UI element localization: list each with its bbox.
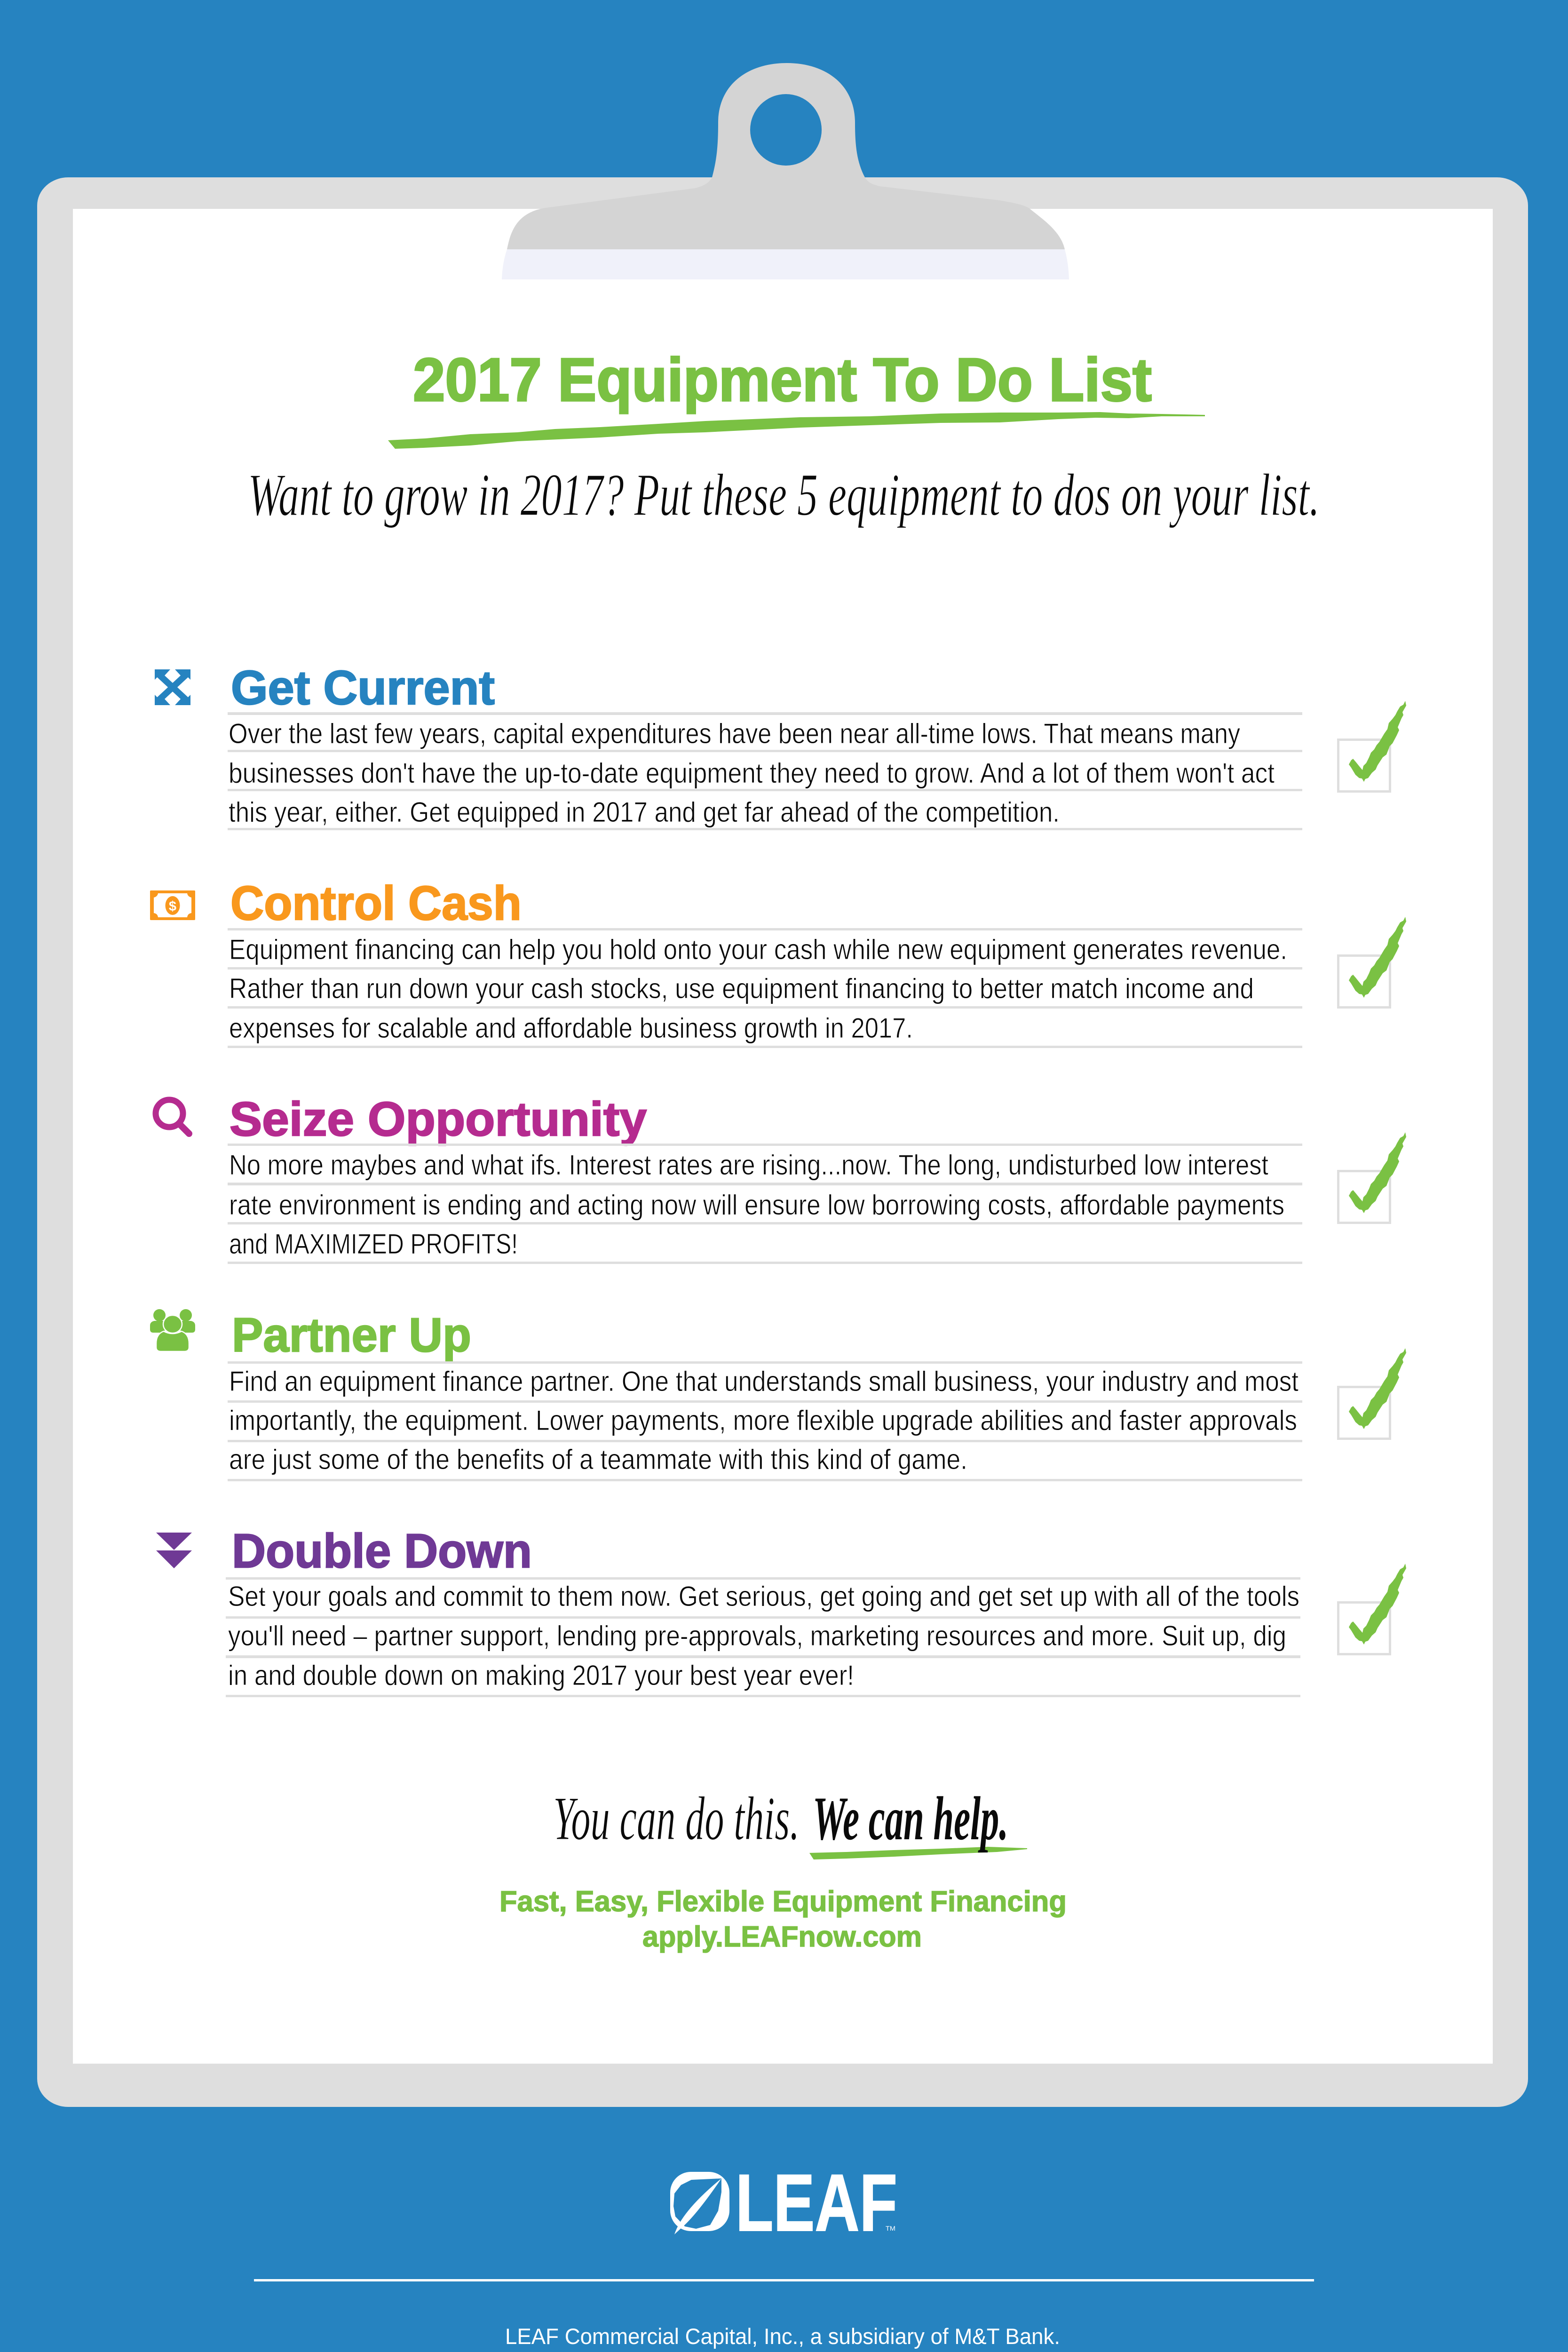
item: Partner Up [150, 1308, 1406, 1481]
icon: checked box [1338, 917, 1406, 1008]
LEAF logo [670, 2158, 897, 2248]
ruled lines [226, 1577, 1300, 1697]
brush underline [809, 1847, 1027, 1859]
body text: Over the last few years, capital expenditures have been near all-time lows. That means many [229, 718, 1240, 749]
icon: expand arrows [155, 669, 190, 705]
item: Double Down [156, 1524, 1406, 1697]
LEAF logo: LEAF [736, 2158, 897, 2248]
icon: money bill [150, 890, 195, 920]
paper sheet [73, 209, 1493, 2064]
body text: rate environment is ending and acting now will ensure low borrowing costs, affordable payments [229, 1189, 1284, 1221]
clipboard board [37, 177, 1528, 2107]
title: 2017 Equipment To Do List [413, 345, 1152, 414]
heading: Seize Opportunity [230, 1092, 647, 1146]
icon: checked box [1338, 1564, 1406, 1654]
heading: Double Down [232, 1524, 532, 1578]
body text: Equipment financing can help you hold onto your cash while new equipment generates revenue. [229, 934, 1287, 965]
body text [229, 934, 1287, 1044]
ruled lines [228, 1361, 1302, 1481]
icon: double down arrows [156, 1533, 192, 1568]
icon: money bill: $ [169, 899, 176, 914]
call to action: apply.LEAFnow.com [642, 1921, 922, 1953]
body text: in and double down on making 2017 your best year ever! [228, 1660, 854, 1691]
item: Seize Opportunity [156, 1092, 1406, 1264]
body text: you'll need – partner support, lending pre-approvals, marketing resources and more. Suit up, dig [228, 1620, 1286, 1652]
body text: No more maybes and what ifs. Interest rates are rising...now. The long, undisturbed low interest [229, 1149, 1268, 1181]
body text [229, 718, 1275, 828]
body text: Rather than run down your cash stocks, use equipment financing to better match income and [229, 973, 1254, 1004]
body text [228, 1581, 1299, 1691]
heading: Partner Up [232, 1308, 471, 1362]
heading: Control Cash [230, 876, 522, 930]
footer divider [254, 2279, 1314, 2281]
handwritten closing line: We can help. [813, 1784, 1008, 1853]
item: Control Cash [150, 876, 1406, 1048]
body text [229, 1366, 1299, 1475]
body text: this year, either. Get equipped in 2017 and get far ahead of the competition. [229, 796, 1060, 828]
icon: checked box [1338, 701, 1406, 791]
icon: magnifier [156, 1100, 189, 1134]
icon: checked box [1338, 1348, 1406, 1438]
heading: Get Current [231, 661, 495, 715]
body text: businesses don't have the up-to-date equipment they need to grow. And a lot of them won't act [229, 757, 1275, 789]
call to action: Fast, Easy, Flexible Equipment Financing [499, 1885, 1067, 1918]
body text: and MAXIMIZED PROFITS! [229, 1228, 518, 1260]
ruled lines [228, 1144, 1302, 1264]
body text: Find an equipment finance partner. One that understands small business, your industry and most [229, 1366, 1299, 1397]
body text: importantly, the equipment. Lower payments, more flexible upgrade abilities and faster approvals [229, 1405, 1297, 1436]
clipboard clip [502, 63, 1069, 279]
body text: are just some of the benefits of a teammate with this kind of game. [229, 1444, 967, 1475]
ruled lines [228, 712, 1302, 830]
LEAF logo: TM [886, 2225, 895, 2232]
logo leaf mark [670, 2172, 729, 2234]
icon: checked box [1338, 1132, 1406, 1223]
company line: LEAF Commercial Capital, Inc., a subsidiary of M&T Bank. [505, 2324, 1060, 2349]
handwritten closing line: You can do this. [553, 1784, 800, 1853]
ruled lines [228, 928, 1302, 1048]
item: Get Current [155, 661, 1406, 830]
title brush underline [388, 412, 1205, 449]
body text [229, 1149, 1284, 1260]
body text: Set your goals and commit to them now. Get serious, get going and get set up with all of the tools [228, 1581, 1299, 1612]
body text: expenses for scalable and affordable business growth in 2017. [229, 1012, 913, 1044]
call to action [499, 1885, 1067, 1953]
icon: group of people [150, 1309, 195, 1351]
